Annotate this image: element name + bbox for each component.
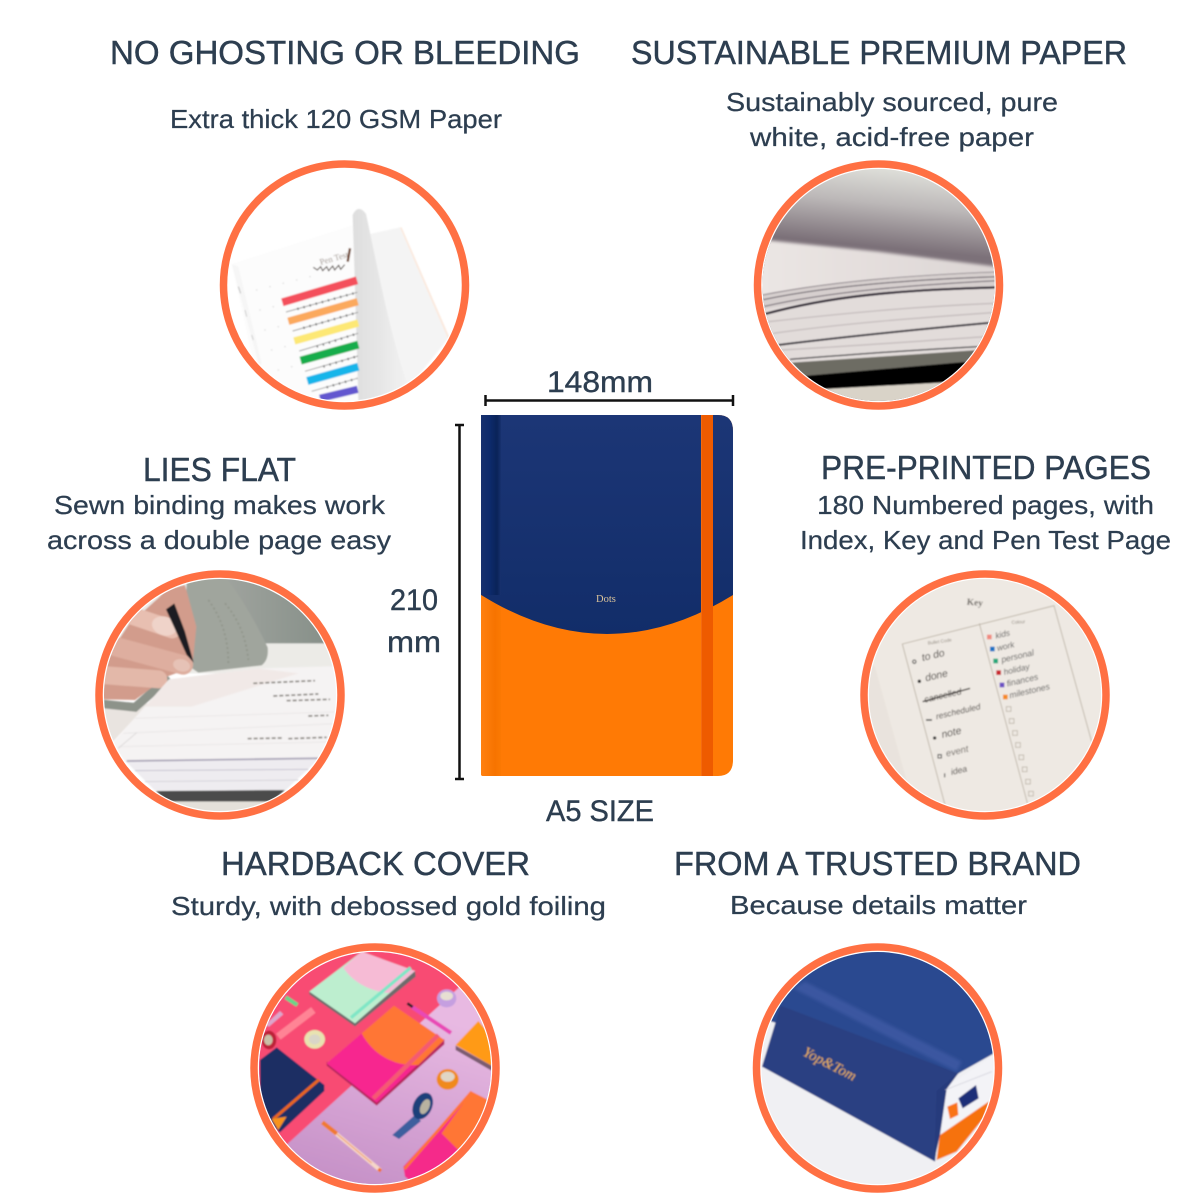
panel: sustainable premium paper (631, 34, 1127, 420)
photo: bullet key page in circle: idea (950, 763, 968, 777)
heading: no ghosting or bleeding: NO GHOSTING OR BLEEDING (110, 34, 580, 71)
panel: hardback cover (171, 845, 606, 1200)
arrow: width dimension line (486, 395, 733, 406)
photo: flat lay of colourful notebooks in circle (250, 943, 500, 1193)
text: sturdy with gold foiling: Sturdy, with debossed gold foiling (171, 891, 606, 921)
photo: bullet key page in circle: note (941, 726, 963, 741)
photo: bullet key page in circle: personal (999, 647, 1036, 665)
photo: bullet key page in circle: Key (966, 598, 984, 609)
photo: bullet key page in circle: Bullet Code (927, 637, 952, 646)
text: cover label: Dots (596, 594, 616, 605)
arrow: height dimension line (455, 425, 464, 779)
text: sewn binding: across a double page easy (47, 525, 391, 555)
text: sustainably sourced paper (726, 87, 1058, 152)
photo: bullet key page in circle: work (996, 639, 1016, 653)
photo: bullet key page in circle: rescheduled (935, 701, 982, 721)
panel: pre-printed pages (800, 449, 1171, 820)
heading: hardback cover: HARDBACK COVER (221, 845, 530, 882)
heading: pre-printed pages: PRE-PRINTED PAGES (821, 449, 1151, 486)
text: sewn binding: Sewn binding makes work (54, 490, 386, 520)
illustration: navy and orange notebook (481, 415, 733, 776)
photo: hand writing in open notebook in circle (98, 573, 345, 817)
text: numbered pages: 180 Numbered pages, with (817, 490, 1154, 520)
photo: stacked paper edge in circle (754, 160, 1004, 410)
photo: bullet key page in circle: kids (994, 628, 1011, 641)
photo: book spine close-up with gold logo in circle (750, 945, 1003, 1198)
heading: from a trusted brand: FROM A TRUSTED BRAND (674, 845, 1081, 882)
photo: bullet key page in circle: event (945, 744, 970, 759)
text: numbered pages: Index, Key and Pen Test Page (800, 525, 1171, 555)
panel: notebook with dimensions (387, 366, 733, 828)
text: sustainably sourced paper: Sustainably sourced, pure (726, 87, 1058, 117)
label: 210 mm (387, 584, 441, 659)
heading: lies flat: LIES FLAT (143, 451, 296, 488)
label: 148mm: 148mm (547, 366, 653, 399)
photo: bullet key page in circle: finances (1006, 671, 1040, 689)
photo: bullet key page in circle (863, 573, 1110, 820)
label: 210 mm: 210 (390, 584, 438, 617)
photo: bullet key page in circle: milestones (1008, 681, 1051, 700)
photo: bullet key page in circle: Colour (1011, 619, 1026, 625)
photo: bullet key page in circle: cancelled (923, 686, 963, 705)
label: a5 size: A5 SIZE (546, 795, 654, 828)
text: because details matter: Because details matter (730, 890, 1027, 920)
text: numbered pages (800, 490, 1171, 555)
panel: no ghosting or bleeding (110, 34, 580, 407)
photo: bullet key page in circle: to do (921, 648, 946, 664)
photo: bullet key page in circle: done (924, 668, 949, 684)
heading: sustainable premium paper: SUSTAINABLE PREMIUM PAPER (631, 34, 1127, 71)
photo: bullet key page in circle: holiday (1003, 661, 1031, 677)
text: sustainably sourced paper: white, acid-free paper (749, 122, 1034, 152)
panel: lies flat (47, 451, 391, 817)
photo: pen test page in circle: Pen Test (318, 249, 350, 267)
photo: book spine close-up with gold logo in circle: Yop&Tom (800, 1044, 859, 1085)
text: sewn binding (47, 490, 391, 555)
label: 210 mm: mm (387, 626, 441, 659)
text: extra thick paper: Extra thick 120 GSM Paper (170, 104, 502, 134)
photo: pen test page in circle (224, 164, 466, 407)
panel: from a trusted brand (674, 845, 1081, 1198)
